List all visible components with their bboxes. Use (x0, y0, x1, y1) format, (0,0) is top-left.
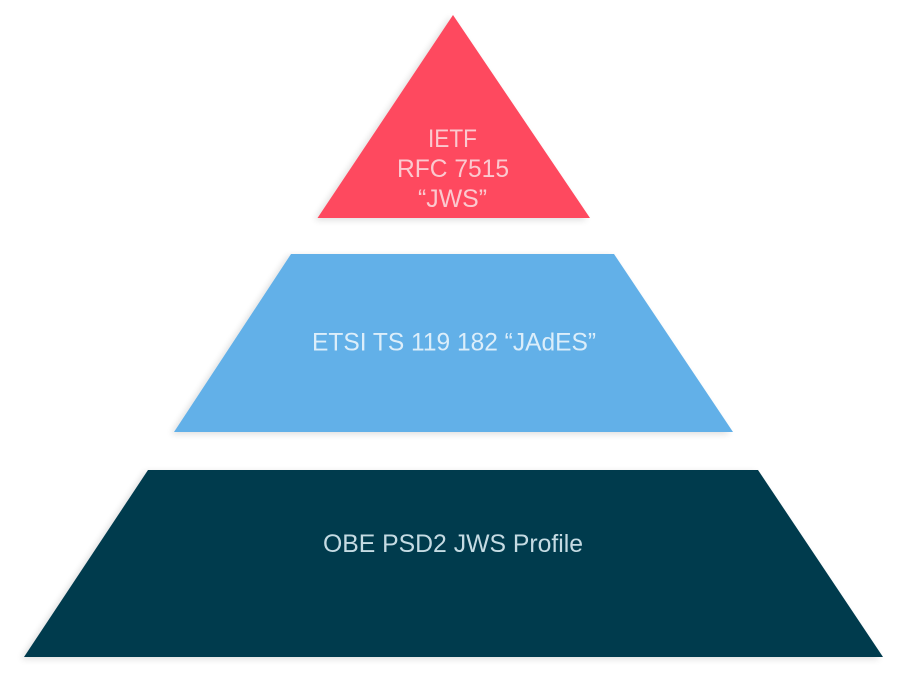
panel: middle tier ETSI TS 119 182 (174, 254, 733, 432)
label: OBE PSD2 JWS Profile: OBE PSD2 JWS Profile (323, 530, 583, 558)
label: ETSI TS 119 182 JAdES: ETSI TS 119 182 “JAdES” (312, 328, 596, 356)
label: IETF RFC 7515 JWS: “JWS” (418, 185, 487, 213)
label: IETF RFC 7515 JWS: IETF (428, 125, 477, 153)
dark navy trapezoid (24, 470, 883, 657)
label: IETF RFC 7515 JWS: RFC 7515 (397, 155, 509, 183)
blue trapezoid (174, 254, 733, 432)
panel: bottom tier OBE PSD2 JWS Profile (24, 470, 883, 657)
label: IETF RFC 7515 JWS (397, 125, 509, 213)
red triangle (318, 15, 590, 218)
panel: top tier IETF RFC 7515 (318, 15, 590, 218)
